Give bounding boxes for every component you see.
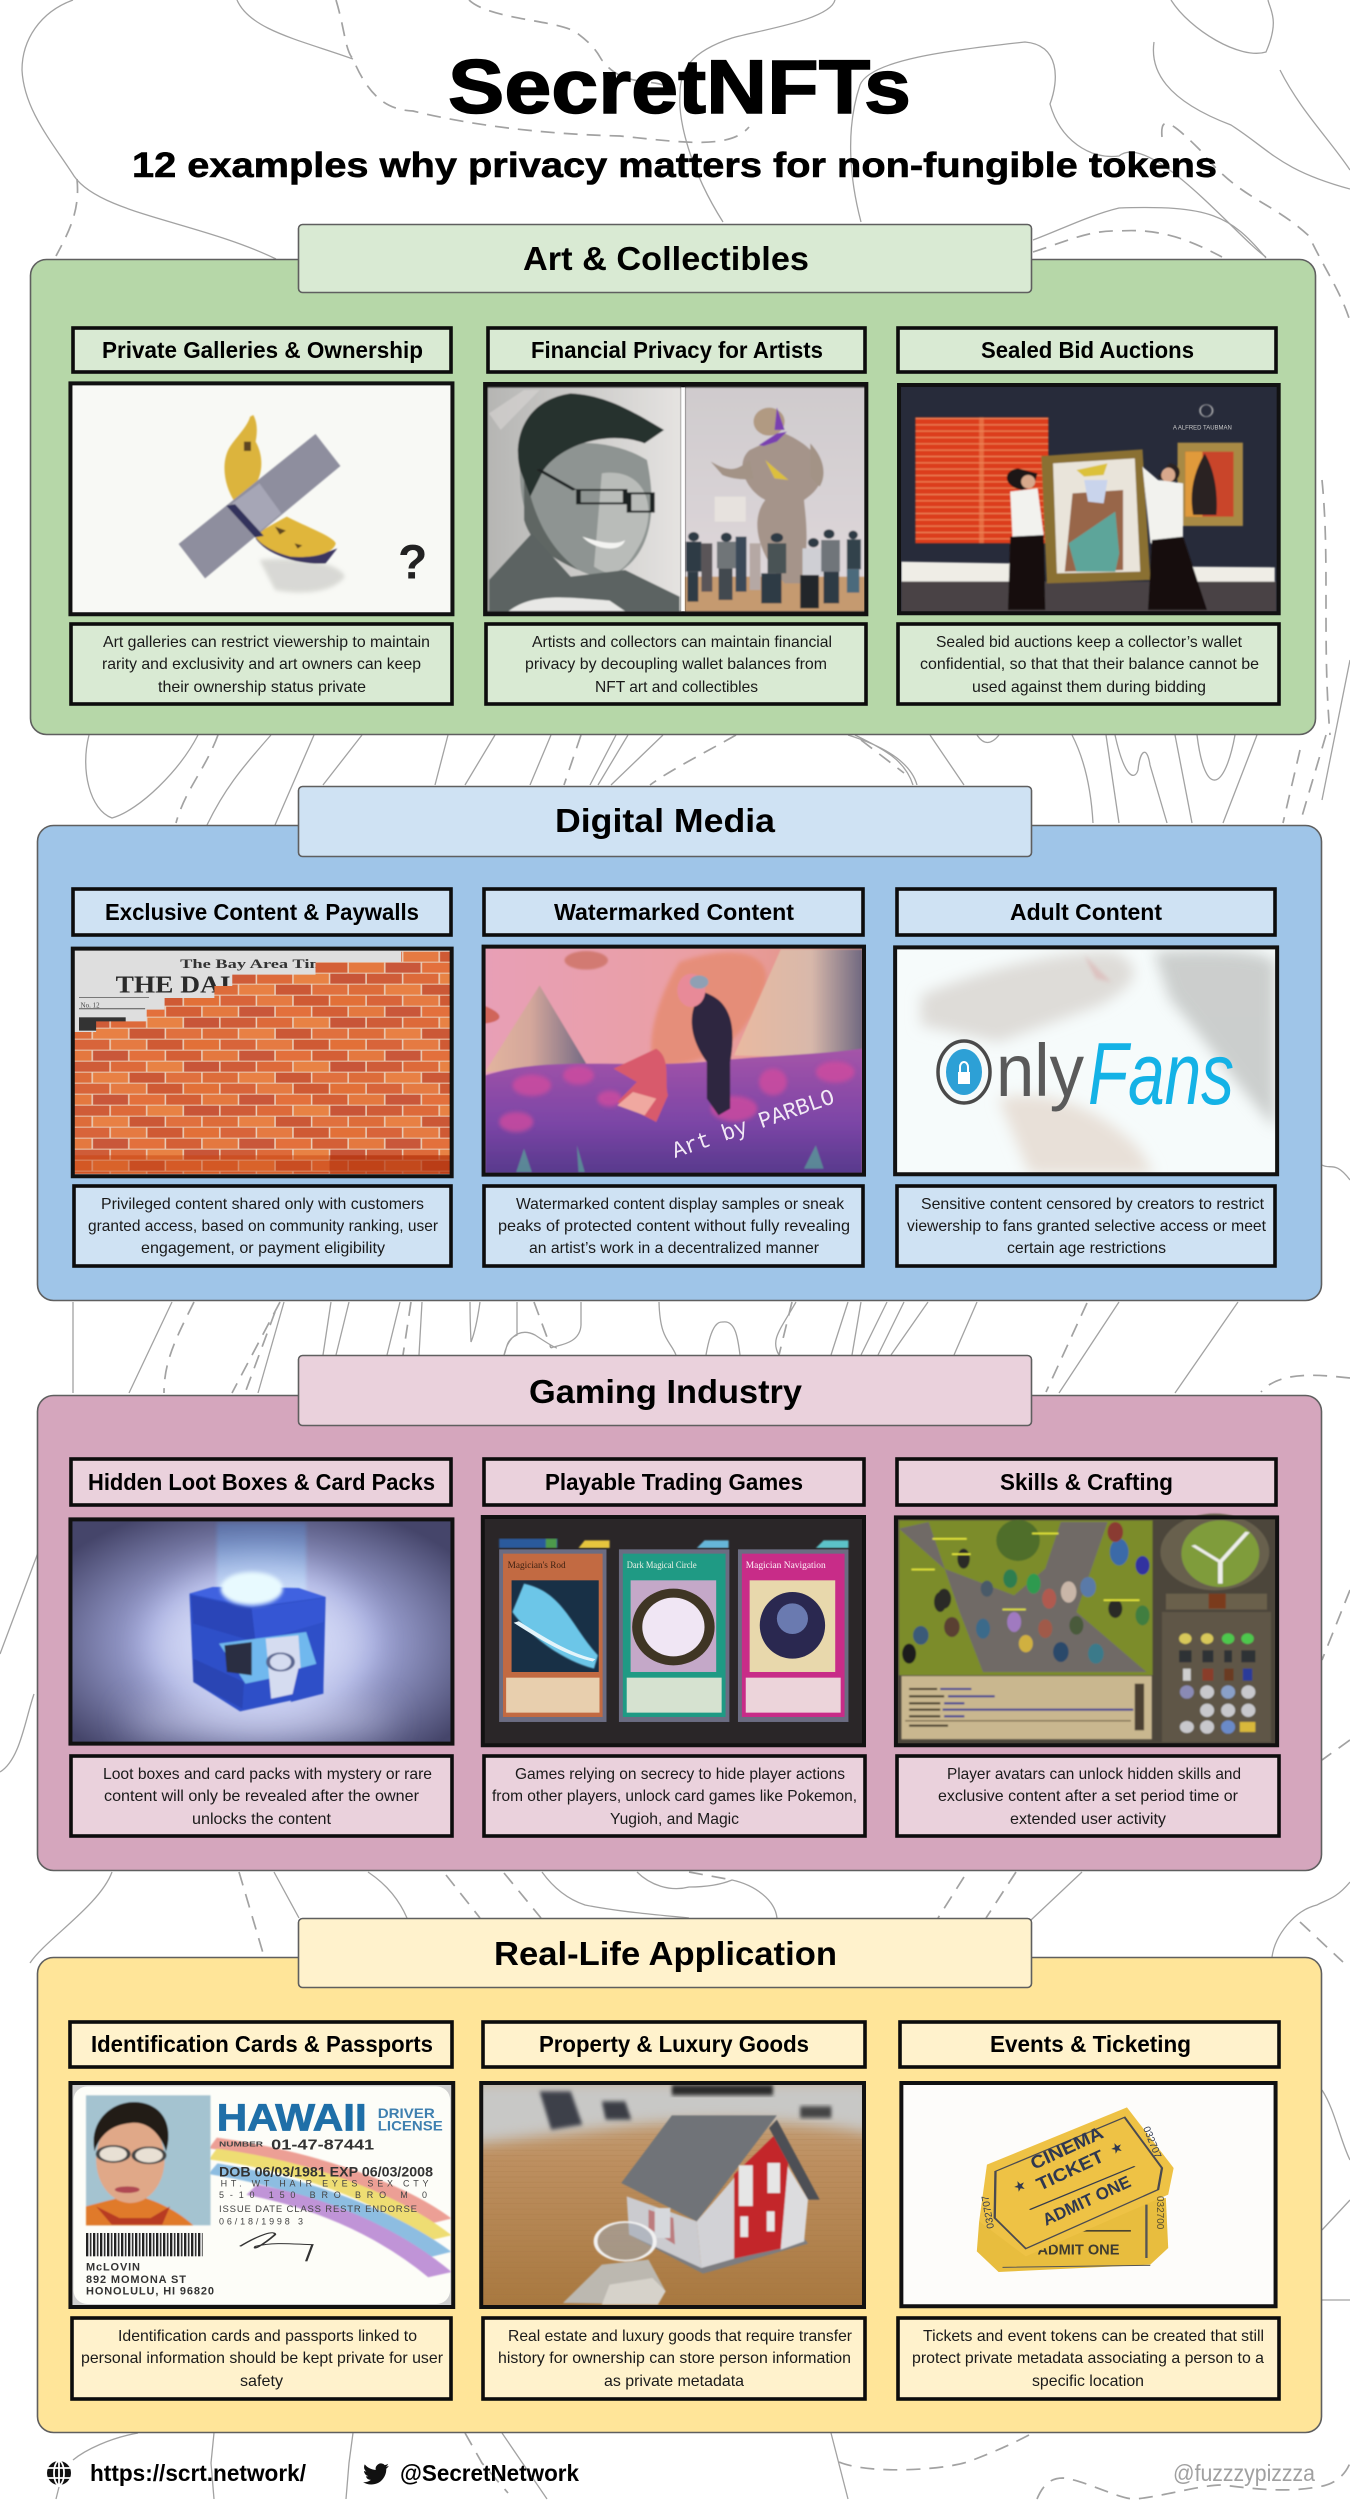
- description: exclusive content: [74, 1186, 451, 1266]
- description: financial privacy: privacy by decoupling wallet balances from: [525, 656, 827, 673]
- description: identification cards: personal information should be kept private for user: [81, 2350, 444, 2367]
- image: brick wall over newspaper: [73, 949, 452, 1176]
- image: trading cards: [483, 1517, 864, 1745]
- card title: hidden loot boxes: Hidden Loot Boxes & Card Packs: [88, 1469, 435, 1495]
- image: hawaii driver license: 06/18/1998 3: [219, 2217, 303, 2227]
- card title: financial privacy: Financial Privacy for Artists: [531, 337, 823, 363]
- image: hawaii driver license: LICENSE: [378, 2117, 443, 2133]
- card title: identification cards: Identification Cards & Passports: [91, 2031, 433, 2057]
- image: cinema tickets: [901, 2083, 1276, 2306]
- image: hawaii driver license: McLOVIN: [86, 2262, 140, 2274]
- description: adult content: certain age restrictions: [1007, 1240, 1166, 1257]
- description: identification cards: [72, 2318, 451, 2399]
- image: banana taped to wall: ?: [398, 537, 427, 590]
- panel: gaming industry: [38, 1356, 1322, 1870]
- card title: sealed bid auctions: Sealed Bid Auctions: [981, 337, 1194, 363]
- description: skills and crafting: Player avatars can unlock hidden skills and: [947, 1766, 1241, 1783]
- image: watermarked artwork: [484, 947, 864, 1175]
- image: hawaii driver license: [70, 2083, 453, 2307]
- panel: art and collectibles: [30, 224, 1316, 734]
- icon: twitter: [363, 2463, 389, 2484]
- ticket text: ADMIT ONE: [1040, 2172, 1134, 2230]
- description: loot boxes: Loot boxes and card packs with mystery or rare: [103, 1766, 432, 1783]
- ticket text: [980, 2123, 1165, 2230]
- panel: digital media: [38, 786, 1322, 1300]
- section heading: real-life application: Real-Life Application: [494, 1935, 837, 1972]
- image: loot box: [70, 1519, 452, 1744]
- card title: adult content: Adult Content: [1010, 899, 1162, 925]
- description: events: specific location: [1032, 2373, 1144, 2390]
- website link: https://scrt.network/: [90, 2460, 307, 2486]
- card title: skills and crafting: [897, 1459, 1276, 1505]
- description: watermarked content: [484, 1186, 863, 1266]
- section heading: digital media: [298, 786, 1032, 856]
- description: private galleries: Art galleries can restrict viewership to maintain: [103, 634, 430, 651]
- card title: watermarked content: Watermarked Content: [554, 899, 794, 925]
- section heading: digital media: Digital Media: [555, 802, 776, 839]
- description: trading games: from other players, unlock card games like Pokemon,: [492, 1788, 857, 1805]
- image: hawaii driver license: DOB 06/03/1981 EXP 06/03/2008: [219, 2163, 433, 2179]
- image: onlyfans logo: Fans: [1088, 1024, 1234, 1123]
- card title: sealed bid auctions: [898, 328, 1276, 372]
- panel background blue: [38, 826, 1322, 1300]
- ticket text: TICKET: [1033, 2146, 1107, 2195]
- description: sealed bid auctions: used against them during bidding: [972, 679, 1206, 696]
- description: adult content: [897, 1186, 1275, 1266]
- card title: exclusive content: [73, 889, 451, 935]
- description: watermarked content: Watermarked content display samples or sneak: [516, 1196, 845, 1213]
- card: dark magical circle: Dark Magical Circle: [627, 1560, 697, 1570]
- description: loot boxes: [71, 1756, 452, 1836]
- description: skills and crafting: exclusive content after a set period time or: [938, 1788, 1239, 1805]
- card title: hidden loot boxes: [71, 1459, 451, 1505]
- card title: events and ticketing: Events & Ticketing: [990, 2031, 1191, 2057]
- footer: [47, 2460, 1315, 2486]
- image: hawaii driver license: NUMBER: [219, 2141, 263, 2148]
- description: watermarked content: peaks of protected content without fully revealing: [498, 1218, 850, 1235]
- section heading: art and collectibles: Art & Collectibles: [523, 240, 809, 277]
- description: identification cards: safety: [240, 2373, 283, 2390]
- description: sealed bid auctions: [898, 624, 1279, 704]
- twitter handle: @SecretNetwork: [400, 2460, 579, 2486]
- ticket text: 032707: [980, 2194, 997, 2229]
- description: trading games: [484, 1756, 865, 1836]
- panel background pink: [38, 1396, 1322, 1870]
- description: loot boxes: content will only be revealed after the owner: [104, 1788, 420, 1805]
- card title: skills and crafting: Skills & Crafting: [1000, 1469, 1173, 1495]
- description: events: [898, 2318, 1279, 2399]
- ticket text: CINEMA: [1027, 2123, 1106, 2174]
- author credit: @fuzzzypizzza: [1173, 2460, 1315, 2486]
- section heading: gaming industry: [298, 1356, 1032, 1426]
- panel: real-life application: [38, 1918, 1322, 2432]
- card: dark magical circle: [619, 1549, 729, 1722]
- section heading: gaming industry: Gaming Industry: [529, 1373, 803, 1410]
- description: skills and crafting: extended user activity: [1010, 1811, 1166, 1828]
- image: model house with keys: [470, 2081, 874, 2307]
- description: property: as private metadata: [604, 2373, 744, 2390]
- description: trading games: Games relying on secrecy to hide player actions: [515, 1766, 845, 1783]
- image: hawaii driver license: 892 MOMONA ST: [86, 2274, 186, 2286]
- description: sealed bid auctions: Sealed bid auctions keep a collector’s wallet: [936, 634, 1243, 651]
- image: onlyfans logo: nly: [996, 1029, 1084, 1112]
- image: portrait and statue: [485, 384, 866, 614]
- card title: property and luxury: Property & Luxury Goods: [539, 2031, 809, 2057]
- card: magician's rod: Magician's Rod: [508, 1560, 566, 1570]
- image: hawaii driver license: 01-47-87441: [271, 2137, 374, 2154]
- title: SecretNFTs: [448, 45, 911, 130]
- description: private galleries: their ownership status private: [158, 679, 366, 696]
- icon: globe: [47, 2461, 71, 2485]
- image: hawaii driver license: ISSUE DATE CLASS RESTR ENDORSE: [219, 2204, 417, 2215]
- card title: financial privacy: [488, 328, 865, 372]
- description: exclusive content: Privileged content shared only with customers: [101, 1196, 424, 1213]
- description: private galleries: rarity and exclusivity and art owners can keep: [102, 656, 421, 673]
- section heading: real-life application: [298, 1918, 1032, 1988]
- description: loot boxes: unlocks the content: [192, 1811, 332, 1828]
- image: auction house paintings: [899, 385, 1279, 613]
- card title: playable trading games: Playable Trading Games: [545, 1469, 803, 1495]
- description: watermarked content: an artist’s work in a decentralized manner: [529, 1240, 820, 1257]
- description: skills and crafting: [897, 1756, 1279, 1836]
- image: game screenshot: [896, 1514, 1277, 1745]
- image: cinema tickets: ADMIT ONE: [1037, 2242, 1119, 2259]
- card title: property and luxury: [483, 2022, 865, 2067]
- card title: private galleries: Private Galleries & Ownership: [102, 337, 423, 363]
- description: trading games: Yugioh, and Magic: [610, 1811, 739, 1828]
- description: property: Real estate and luxury goods that require transfer: [508, 2328, 853, 2345]
- image: brick wall over newspaper: No. 12: [81, 1001, 100, 1009]
- description: property: history for ownership can store person information: [498, 2350, 851, 2367]
- panel background green: [30, 260, 1316, 734]
- description: financial privacy: [486, 624, 866, 704]
- ticket text: 032700: [1154, 2196, 1165, 2230]
- image: hawaii driver license: HT. WT HAIR EYES SEX CTY: [221, 2178, 429, 2188]
- card: magician navigation: Magician Navigation: [746, 1560, 826, 1570]
- card title: events and ticketing: [900, 2022, 1279, 2067]
- image: banana taped to wall: [70, 383, 452, 614]
- subtitle: 12 examples why privacy matters for non-fungible tokens: [132, 146, 1217, 185]
- image: auction house paintings: A ALFRED TAUBMAN: [1173, 425, 1232, 431]
- ticket text: 032707: [1140, 2125, 1163, 2160]
- card title: watermarked content: [484, 889, 863, 935]
- card title: playable trading games: [484, 1459, 864, 1505]
- description: adult content: Sensitive content censored by creators to restrict: [921, 1196, 1265, 1213]
- image: brick wall over newspaper: THE DAI: [116, 973, 231, 999]
- description: events: protect private metadata associating a person to a: [912, 2350, 1264, 2367]
- image: onlyfans logo: [895, 947, 1277, 1174]
- description: financial privacy: NFT art and collectibles: [595, 679, 758, 696]
- ticket text: ★: [1108, 2138, 1126, 2158]
- description: sealed bid auctions: confidential, so that that their balance cannot be: [920, 656, 1259, 673]
- description: exclusive content: granted access, based on community ranking, user: [88, 1218, 439, 1235]
- panel background yellow: [38, 1958, 1322, 2432]
- card: magician navigation: [738, 1549, 848, 1722]
- description: private galleries: [71, 624, 452, 704]
- section heading: art and collectibles: [298, 224, 1032, 292]
- description: adult content: viewership to fans granted selective access or meet: [907, 1218, 1267, 1235]
- card title: private galleries: [73, 328, 451, 372]
- card: magician's rod: [499, 1549, 606, 1722]
- card title: adult content: [897, 889, 1275, 935]
- image: hawaii driver license: HAWAII: [217, 2098, 367, 2140]
- description: identification cards: Identification cards and passports linked to: [118, 2328, 417, 2345]
- description: financial privacy: Artists and collectors can maintain financial: [532, 634, 832, 651]
- card title: exclusive content: Exclusive Content & Paywalls: [105, 899, 419, 925]
- watermark text: Art by PARBLO: [669, 1085, 838, 1165]
- description: property: [483, 2318, 865, 2399]
- description: exclusive content: engagement, or payment eligibility: [141, 1240, 385, 1257]
- ticket text: ★: [1011, 2176, 1029, 2196]
- image: hawaii driver license: 5-10 150 BRO BRO M 0: [219, 2190, 427, 2200]
- image: brick wall over newspaper: The Bay Area Times: [180, 956, 340, 971]
- image: hawaii driver license: DRIVER: [378, 2105, 435, 2121]
- image: hawaii driver license: HONOLULU, HI 96820: [86, 2286, 214, 2298]
- card title: identification cards: [70, 2022, 452, 2067]
- description: events: Tickets and event tokens can be created that still: [923, 2328, 1264, 2345]
